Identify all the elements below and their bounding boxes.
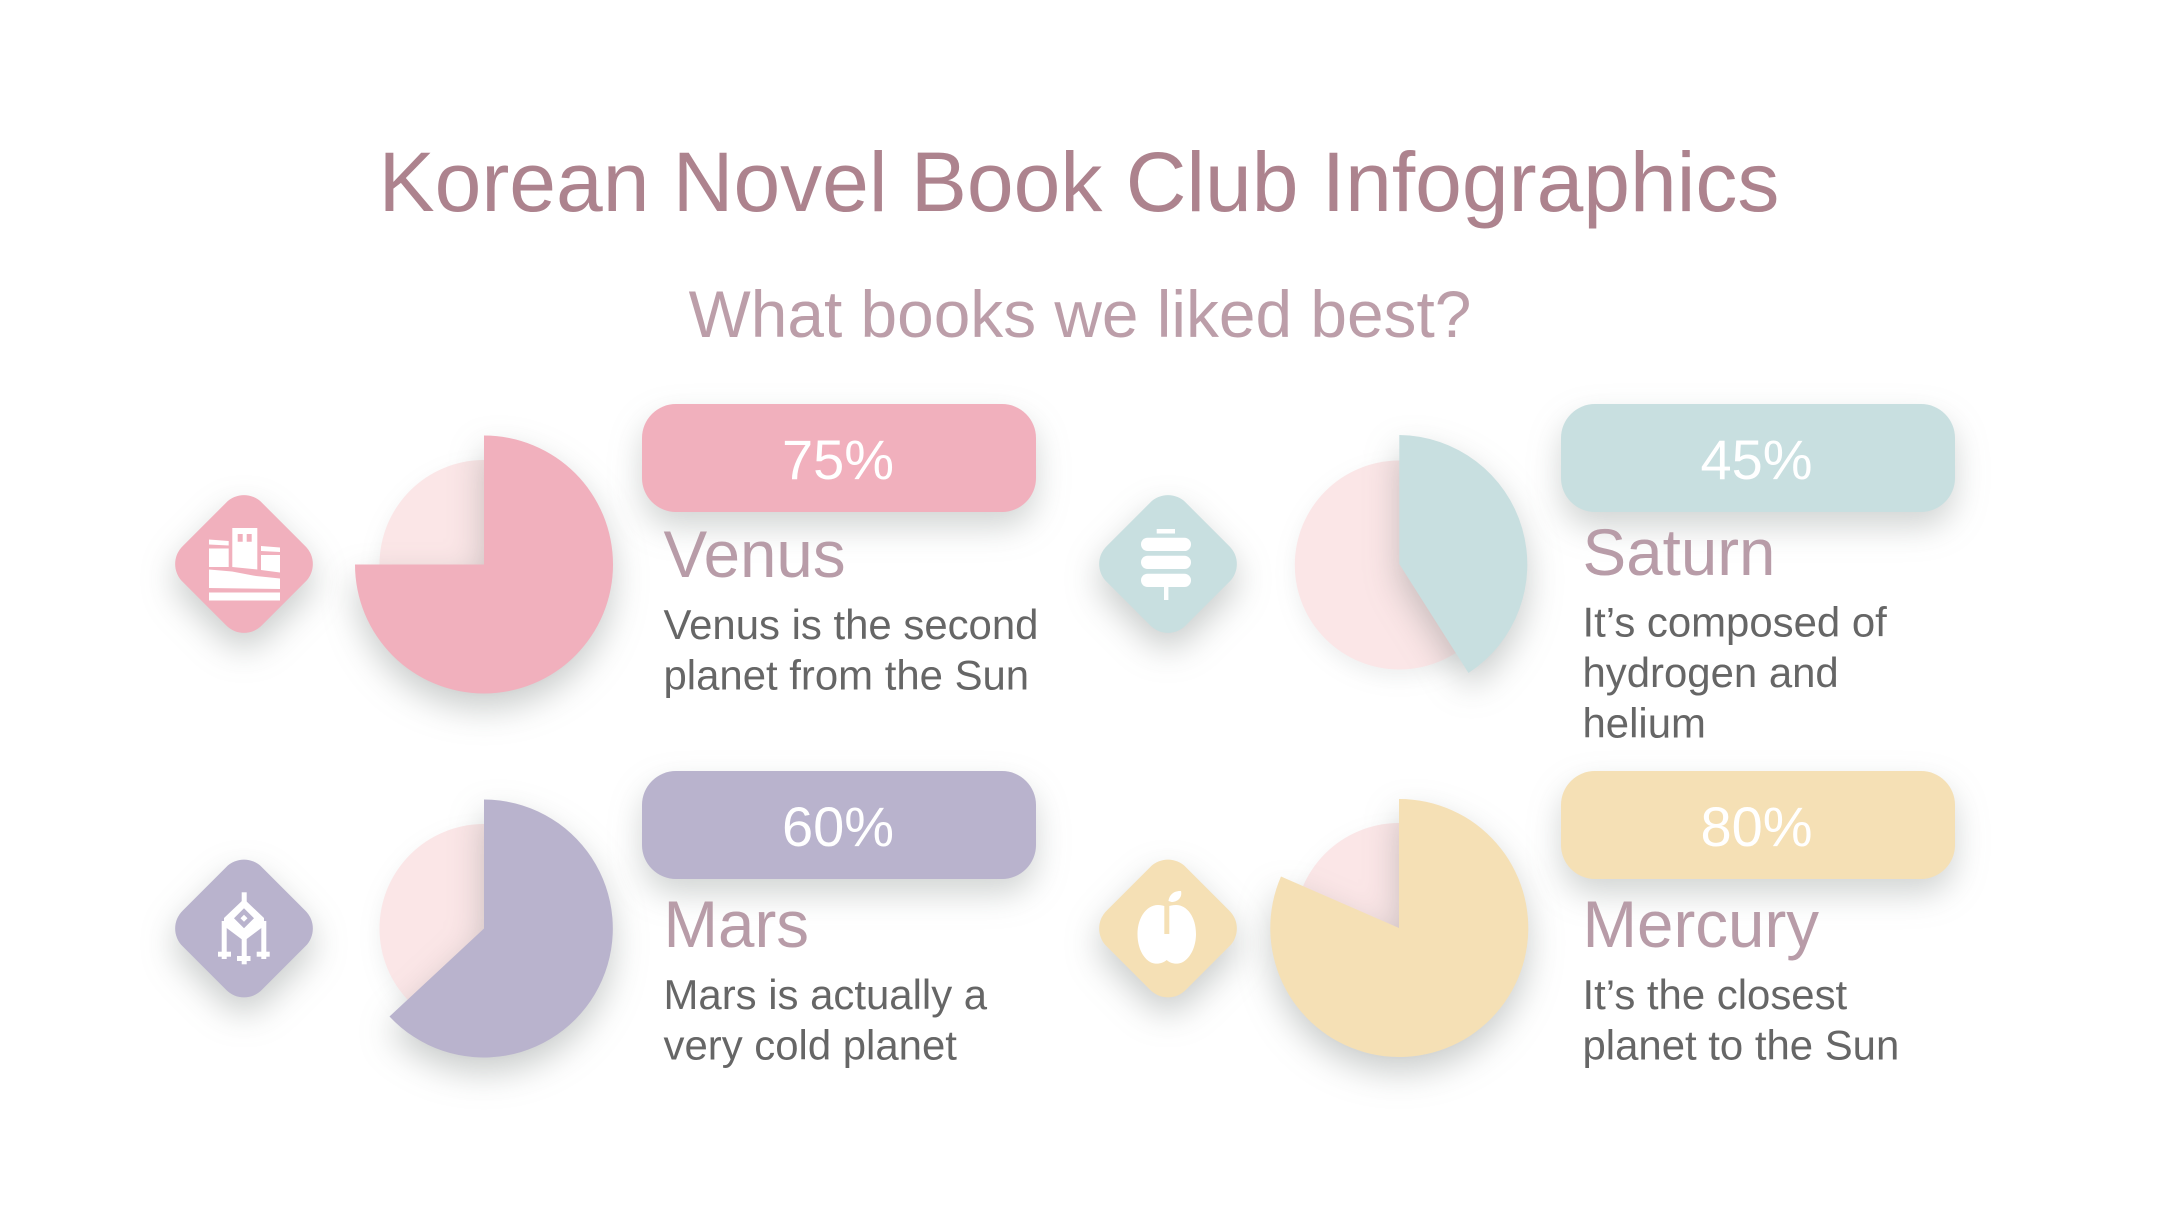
description: Mars: Mars is actually a	[664, 971, 988, 1018]
percentage pill: 80%	[1561, 771, 1955, 879]
description: Mercury: planet to the Sun	[1582, 1022, 1899, 1068]
percentage pill: 80%: 80%	[1700, 795, 1813, 858]
description: Saturn: hydrogen and	[1582, 649, 1839, 696]
icon: yellow diamond with apple	[1089, 849, 1247, 1008]
icon: pink diamond with buildings	[165, 485, 323, 643]
percentage pill: 75%: 75%	[782, 428, 894, 491]
heading: Mercury: Mercury	[1582, 888, 1819, 961]
description: Mars: very cold planet	[664, 1022, 957, 1068]
percentage pill: 45%: 45%	[1700, 428, 1813, 491]
panel: Venus	[165, 404, 1038, 698]
description: Saturn: It’s composed of	[1582, 598, 1887, 646]
percentage pill: 45%	[1561, 404, 1955, 512]
percentage pill: 60%	[642, 771, 1036, 879]
description: Venus: planet from the Sun	[664, 652, 1029, 698]
icon: lavender diamond with lantern	[165, 849, 323, 1008]
pie chart: 45%	[1295, 435, 1527, 673]
panel: Saturn	[1089, 404, 1955, 746]
description: Mercury: It’s the closest	[1582, 971, 1848, 1018]
subtitle: What books we liked best?	[689, 277, 1471, 351]
percentage pill: 75%	[642, 404, 1036, 512]
pie chart: 75%	[355, 436, 613, 694]
heading: Saturn: Saturn	[1582, 516, 1775, 589]
panel: Mars	[165, 771, 1036, 1068]
pie chart: 80%	[1270, 799, 1528, 1057]
heading: Venus: Venus	[664, 518, 846, 591]
pie chart: 60%	[380, 800, 613, 1057]
description: Venus: Venus is the second	[664, 601, 1038, 648]
percentage pill: 60%: 60%	[782, 795, 894, 858]
heading: Mars: Mars	[664, 888, 809, 961]
panel: Mercury	[1089, 771, 1955, 1068]
icon: teal diamond with stacked skewer	[1089, 485, 1247, 643]
description: Saturn: helium	[1582, 700, 1706, 746]
title: Korean Novel Book Club Infographics	[379, 135, 1779, 229]
